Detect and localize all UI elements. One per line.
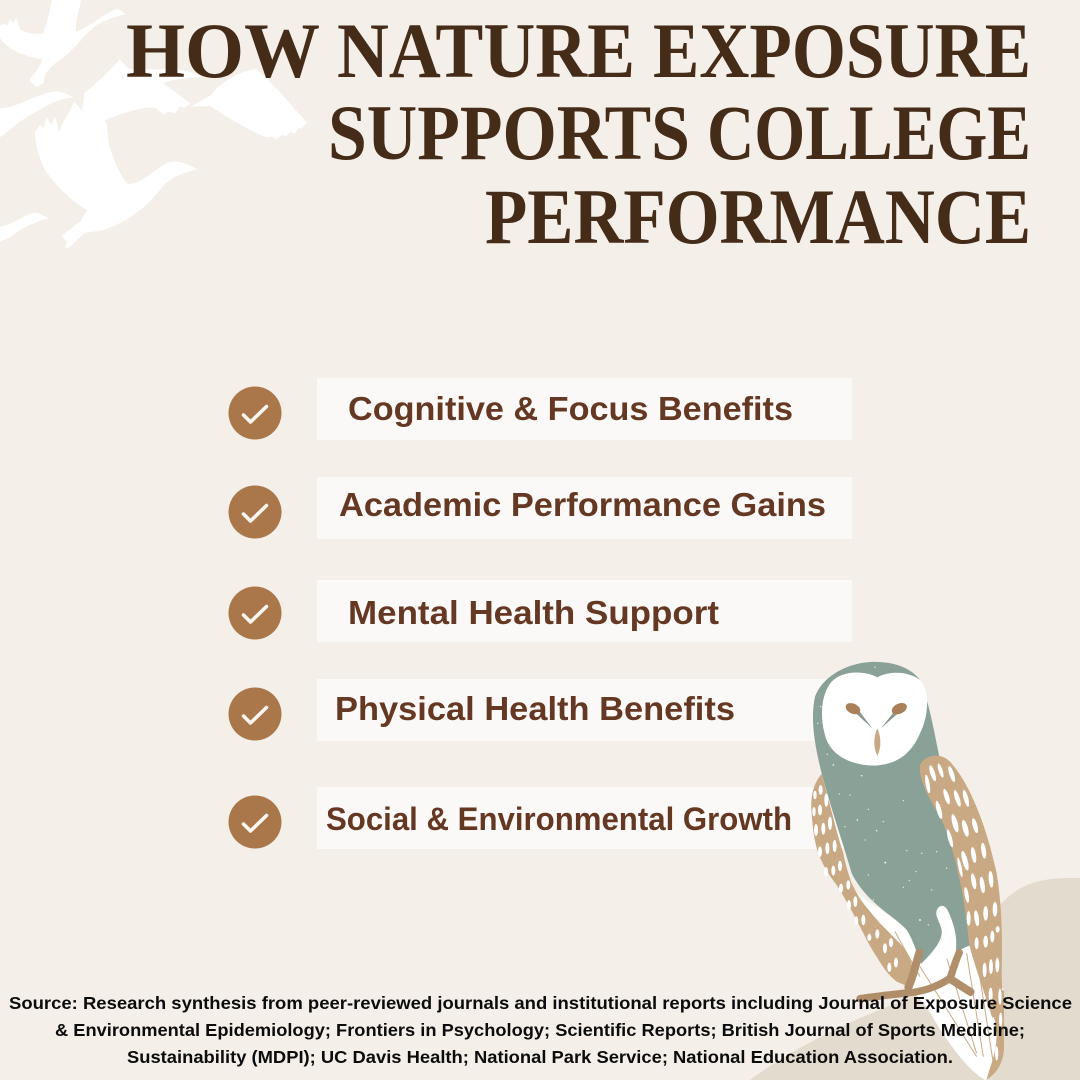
list item: cognitive and focus benefits: Cognitive & Focus Benefits <box>348 391 793 428</box>
owl body <box>813 662 971 965</box>
source citation: Sustainability (MDPI); UC Davis Health; National Park Service; National Education Association. <box>127 1047 953 1067</box>
list item: social and environmental growth <box>228 787 852 849</box>
list item: social and environmental growth: Social & Environmental Growth <box>326 801 792 837</box>
title: NATURE <box>337 7 635 94</box>
owl tail feathers <box>857 893 1004 1080</box>
owl body speckles <box>817 667 947 926</box>
list item: cognitive and focus benefits <box>228 378 852 440</box>
list item: academic performance gains <box>228 477 852 539</box>
owl wing spots <box>812 763 1002 1061</box>
list item: mental health support <box>228 580 852 642</box>
list item: mental health support: Mental Health Support <box>348 595 719 632</box>
icon: flying geese <box>0 0 307 248</box>
source citation <box>9 993 1072 1067</box>
owl left wing <box>811 774 912 987</box>
decorative hill <box>750 878 1080 1080</box>
list item: physical health benefits: Physical Health Benefits <box>335 691 735 728</box>
source citation: & Environmental Epidemiology; Frontiers in Psychology; Scientific Reports; British Journal of Sports Medicine; <box>55 1020 1025 1040</box>
icon: barn owl <box>811 662 1004 1080</box>
owl right wing <box>920 756 1004 1050</box>
owl belly white patch <box>918 906 956 967</box>
owl eyes and beak <box>844 701 909 756</box>
owl feet and branch <box>860 953 971 999</box>
list item: academic performance gains: Academic Performance Gains <box>339 487 826 524</box>
title: EXPOSURE <box>653 7 1031 94</box>
title <box>126 7 1031 260</box>
title: SUPPORTS <box>328 89 690 176</box>
owl face <box>822 673 927 766</box>
title: HOW <box>126 7 320 94</box>
list item: physical health benefits <box>228 679 852 741</box>
source citation: Source: Research synthesis from peer-reviewed journals and institutional reports including Journal of Exposure Science <box>9 993 1072 1013</box>
